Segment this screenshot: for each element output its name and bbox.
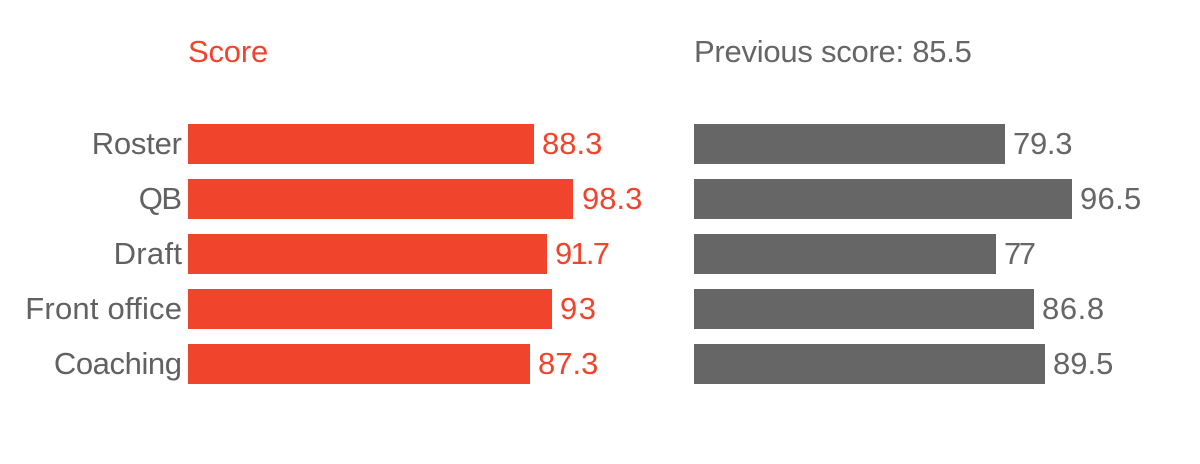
- bar: Draft 77: [694, 234, 996, 274]
- value: 93: 93: [560, 291, 597, 326]
- heading: Score: Score: [188, 34, 268, 69]
- bar: Roster 79.3: [694, 124, 1005, 164]
- value: 96.5: 96.5: [1080, 181, 1142, 216]
- label: Draft: Draft: [114, 236, 182, 271]
- bar: Coaching 89.5: [694, 344, 1045, 384]
- bar: QB 96.5: [694, 179, 1072, 219]
- value: 91.7: 91.7: [555, 236, 608, 271]
- label: Coaching: Coaching: [54, 346, 182, 381]
- bar: Coaching 87.3: [188, 344, 530, 384]
- label: Front office: Front office: [25, 291, 182, 326]
- bar: Draft 91.7: [188, 234, 547, 274]
- value: 86.8: 86.8: [1042, 291, 1105, 326]
- row labels: [25, 126, 182, 381]
- value: 77: 77: [1004, 236, 1033, 271]
- value: 87.3: 87.3: [538, 346, 598, 381]
- value: 98.3: 98.3: [582, 181, 642, 216]
- bar: QB 98.3: [188, 179, 573, 219]
- label: Roster: Roster: [92, 126, 182, 161]
- value: 88.3: 88.3: [542, 126, 602, 161]
- bar chart: previous score: [694, 124, 1142, 384]
- bar chart: score: [188, 124, 642, 384]
- label: QB: QB: [139, 181, 180, 216]
- bar: Front office 86.8: [694, 289, 1034, 329]
- value: 79.3: 79.3: [1013, 126, 1072, 161]
- value: 89.5: 89.5: [1053, 346, 1113, 381]
- bar: Front office 93: [188, 289, 552, 329]
- bar: Roster 88.3: [188, 124, 534, 164]
- heading: Previous score: Previous score: 85.5: [694, 34, 972, 69]
